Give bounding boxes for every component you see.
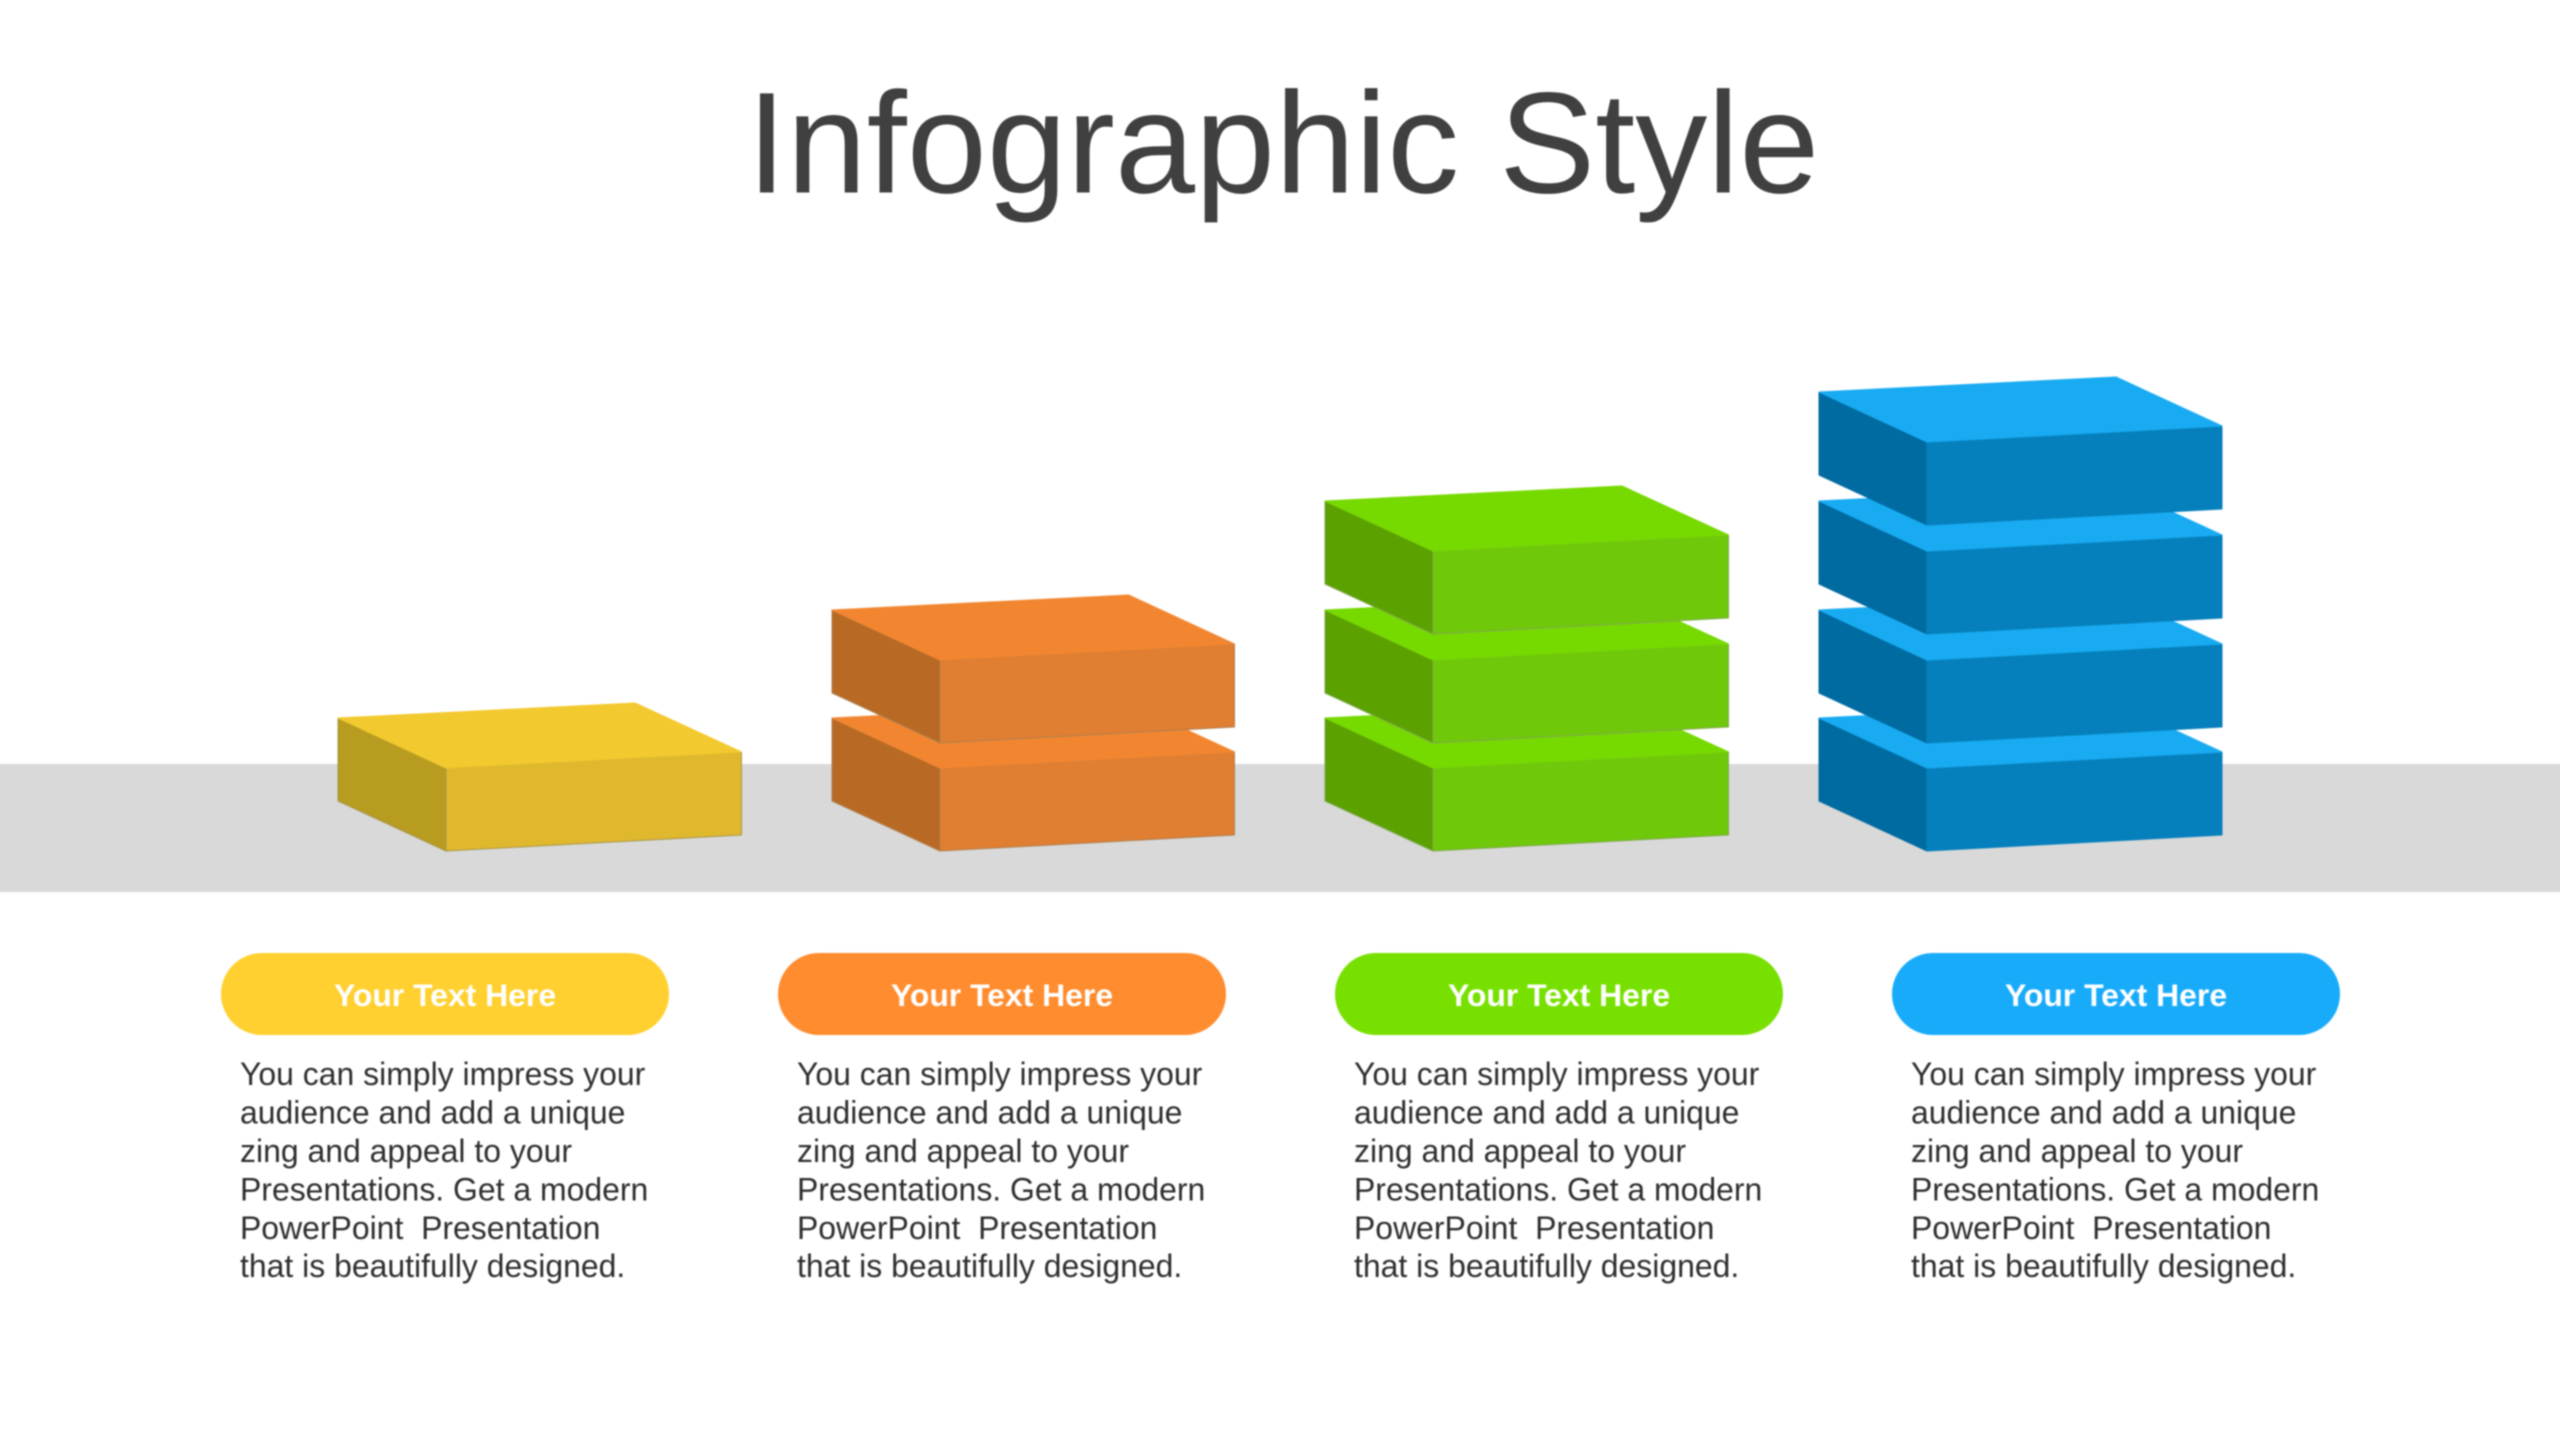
description text 3: Presentations. Get a modern	[1354, 1172, 1762, 1208]
description text 1: audience and add a unique	[240, 1094, 625, 1130]
description text 2: that is beautifully designed.	[797, 1248, 1182, 1284]
description text 1: You can simply impress your	[240, 1056, 646, 1092]
stack 2: orange	[832, 595, 1234, 851]
title: Infographic Style	[747, 62, 1819, 224]
description text 3: audience and add a unique	[1354, 1094, 1739, 1130]
column 3: green label and text	[1335, 953, 1783, 1284]
description text 4: PowerPoint Presentation	[1911, 1210, 2271, 1246]
description text 4: audience and add a unique	[1911, 1094, 2296, 1130]
stack 3: green	[1325, 486, 1728, 851]
description text 2: audience and add a unique	[797, 1094, 1182, 1130]
orange block 2	[832, 595, 1234, 743]
stack 4: blue	[1819, 377, 2222, 851]
blue pill label	[1892, 953, 2340, 1035]
yellow pill label	[221, 953, 669, 1035]
blue block 2	[1819, 595, 2222, 743]
description text 3: PowerPoint Presentation	[1354, 1210, 1714, 1246]
description text 2: Presentations. Get a modern	[797, 1172, 1205, 1208]
blue block 4	[1819, 377, 2222, 525]
description text 1: Presentations. Get a modern	[240, 1172, 648, 1208]
yellow block 1	[338, 703, 742, 851]
green block 1	[1325, 703, 1728, 851]
description text 1: zing and appeal to your	[240, 1133, 572, 1169]
blue block 3	[1819, 486, 2222, 634]
column 1: yellow label and text	[221, 953, 669, 1284]
description text 4: that is beautifully designed.	[1911, 1248, 2296, 1284]
description text 4: zing and appeal to your	[1911, 1133, 2243, 1169]
green block 3	[1325, 486, 1728, 634]
description text 1: that is beautifully designed.	[240, 1248, 625, 1284]
description text 2: PowerPoint Presentation	[797, 1210, 1157, 1246]
column 2: orange label and text	[778, 953, 1226, 1284]
column 4: blue label and text	[1892, 953, 2340, 1284]
description text 2: You can simply impress your	[797, 1056, 1203, 1092]
description text 3: You can simply impress your	[1354, 1056, 1760, 1092]
description text 1: PowerPoint Presentation	[240, 1210, 600, 1246]
orange pill label	[778, 953, 1226, 1035]
blue block 1	[1819, 703, 2222, 851]
orange pill label: Your Text Here	[891, 977, 1113, 1013]
green pill label: Your Text Here	[1448, 977, 1670, 1013]
description text 3: zing and appeal to your	[1354, 1133, 1686, 1169]
yellow pill label: Your Text Here	[334, 977, 556, 1013]
description text 4: You can simply impress your	[1911, 1056, 2317, 1092]
orange block 1	[832, 703, 1234, 851]
blue pill label: Your Text Here	[2005, 977, 2227, 1013]
description text 4: Presentations. Get a modern	[1911, 1172, 2319, 1208]
description text 2: zing and appeal to your	[797, 1133, 1129, 1169]
green block 2	[1325, 595, 1728, 743]
stack 1: yellow	[338, 703, 742, 851]
ground band	[0, 764, 2560, 892]
green pill label	[1335, 953, 1783, 1035]
description text 3: that is beautifully designed.	[1354, 1248, 1739, 1284]
